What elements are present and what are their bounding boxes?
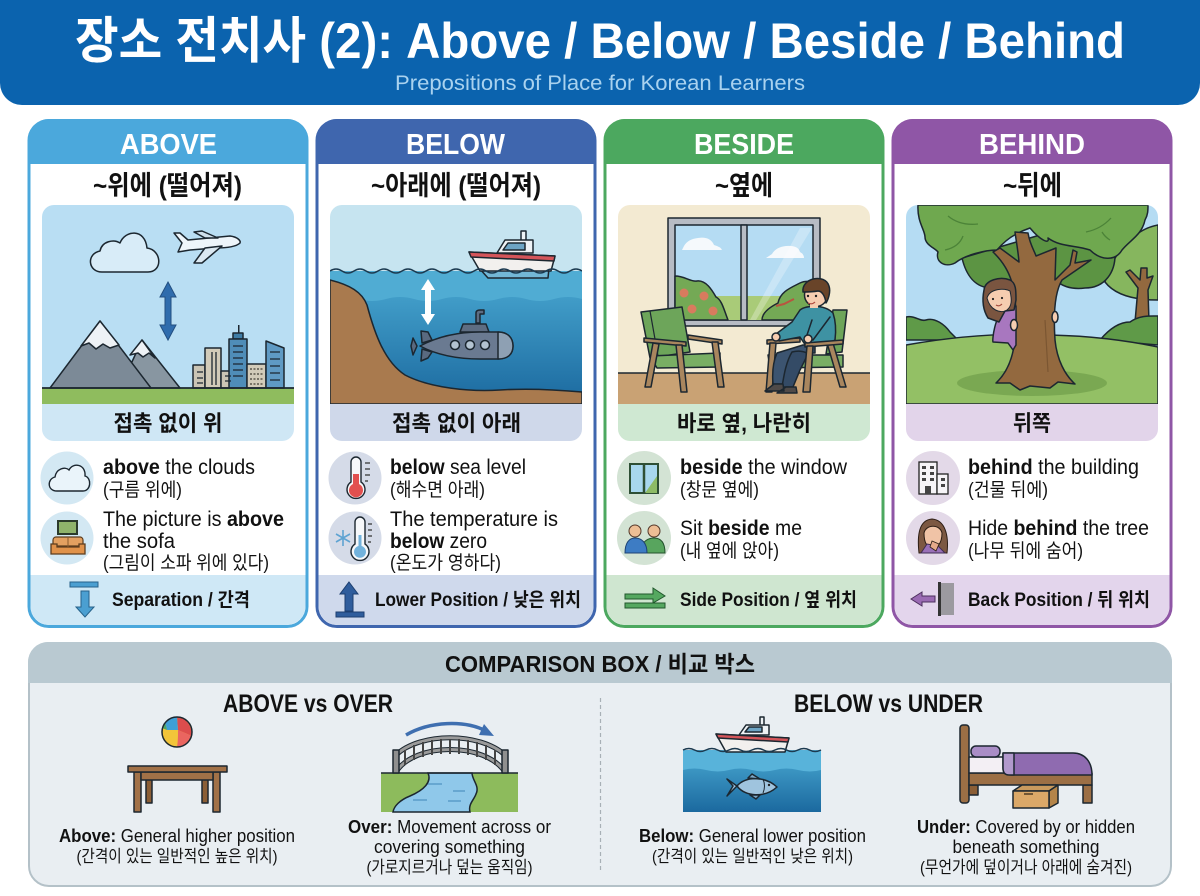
icon: box under bed (960, 725, 1092, 808)
text: below definition (639, 826, 866, 866)
translation: behind the building: (건물 뒤에) (968, 479, 1048, 501)
icon: up arrow over bar (336, 582, 364, 617)
example: picture above the sofa: The picture is above (103, 508, 284, 531)
korean heading: beside: ~옆에 (715, 171, 773, 201)
text: above definition: (간격이 있는 일반적인 높은 위치) (76, 847, 278, 866)
icon: window (617, 451, 671, 505)
panel: comparison box (28, 642, 1172, 886)
example: sit beside me: Sit beside me (680, 517, 802, 540)
example: below zero: (온도가 영하다) (390, 552, 501, 574)
footer: lower position: Lower Position / 낮은 위치 (375, 589, 581, 611)
korean heading: below: ~아래에 (떨어져) (371, 171, 541, 201)
heading: comparison box: COMPARISON BOX / 비교 박스 (445, 651, 755, 677)
example: hide behind the tree: Hide behind the tree (968, 517, 1149, 540)
icon: arrow to wall (911, 582, 954, 616)
text: below definition: Below: General lower position (639, 826, 866, 846)
icon: thermometer (328, 452, 382, 504)
label strip: beside: 바로 옆, 나란히 (677, 411, 811, 436)
label strip: below (330, 404, 582, 441)
footer: back position: Back Position / 뒤 위치 (968, 589, 1150, 611)
panel: below (316, 119, 596, 626)
text: above definition (59, 826, 295, 866)
text: under definition (917, 817, 1135, 877)
label strip: below: 접촉 없이 아래 (392, 411, 521, 436)
panel: above (28, 119, 308, 626)
panel: behind (892, 119, 1172, 626)
footer: separation (30, 575, 306, 625)
example: above the clouds: above the clouds (103, 456, 255, 479)
heading: above: ABOVE (120, 129, 217, 161)
icon: hiding girl (906, 511, 960, 565)
heading: beside: BESIDE (694, 129, 794, 161)
icon: cold thermometer (328, 512, 382, 564)
example: behind the building: behind the building (968, 456, 1139, 479)
illustration: girl hiding behind tree (906, 205, 1158, 404)
footer: back position (894, 575, 1170, 625)
icon: picture above sofa (40, 512, 94, 564)
header banner (0, 0, 1200, 105)
text: under definition: (무언가에 덮이거나 아래에 숨겨진) (920, 858, 1132, 877)
footer: lower position (318, 575, 594, 625)
example: below zero (390, 508, 558, 574)
text: above definition: Above: General higher position (59, 826, 295, 846)
illustration: boat and submarine at sea (330, 205, 582, 404)
icon: two people (617, 511, 671, 565)
label strip: behind: 뒤쪽 (1013, 411, 1051, 436)
translation: below sea level: (해수면 아래) (390, 479, 485, 501)
panel: beside (604, 119, 884, 626)
text: over definition (348, 817, 551, 877)
label strip: behind (906, 404, 1158, 441)
text: under definition: beneath something (952, 837, 1100, 857)
heading: below: BELOW (406, 129, 506, 161)
example: below zero: The temperature is (390, 508, 558, 531)
example: picture above the sofa: the sofa (103, 530, 175, 553)
illustration: sky with cloud, plane, mountains and city (42, 205, 294, 404)
illustration: man sitting beside window (618, 205, 870, 404)
icon: side arrows (625, 588, 665, 608)
title: 장소 전치사 (2): Above / Below / Beside / Behind (75, 13, 1125, 69)
icon: boat above fish (683, 717, 821, 812)
translation: beside the window: (창문 옆에) (680, 479, 759, 501)
subheading: above vs over: ABOVE vs OVER (223, 690, 393, 718)
example: sit beside me: (내 옆에 앉아) (680, 540, 779, 562)
label strip: beside (618, 404, 870, 441)
icon: ball above table (128, 717, 227, 812)
korean heading: above: ~위에 (떨어져) (93, 171, 242, 201)
heading: behind: BEHIND (979, 129, 1085, 161)
subheading: below vs under: BELOW vs UNDER (794, 690, 983, 718)
icon: cloud (40, 452, 94, 504)
footer: side position (606, 575, 882, 625)
translation: above the clouds: (구름 위에) (103, 479, 182, 501)
text: over definition: covering something (374, 837, 525, 857)
example: hide behind the tree (968, 517, 1149, 562)
example: below zero: below zero (390, 530, 487, 553)
example: picture above the sofa (103, 508, 284, 574)
subtitle: Prepositions of Place for Korean Learners (395, 72, 805, 95)
footer: separation: Separation / 간격 (112, 589, 250, 611)
icon: separation arrow (70, 582, 98, 617)
text: under definition: Under: Covered by or hidden (917, 817, 1135, 837)
example: below sea level: below sea level (390, 456, 526, 479)
icon: bridge over river (381, 724, 518, 812)
text: below definition: (간격이 있는 일반적인 낮은 위치) (652, 847, 853, 866)
example: beside the window: beside the window (680, 456, 848, 479)
example: hide behind the tree: (나무 뒤에 숨어) (968, 540, 1083, 562)
text: over definition: Over: Movement across or (348, 817, 551, 837)
label strip: above (42, 404, 294, 441)
footer: side position: Side Position / 옆 위치 (680, 589, 857, 611)
korean heading: behind: ~뒤에 (1003, 171, 1062, 201)
text: over definition: (가로지르거나 덮는 움직임) (366, 858, 532, 877)
icon: building (906, 451, 960, 505)
label strip: above: 접촉 없이 위 (114, 411, 222, 436)
example: picture above the sofa: (그림이 소파 위에 있다) (103, 552, 269, 574)
example: sit beside me (680, 517, 802, 562)
